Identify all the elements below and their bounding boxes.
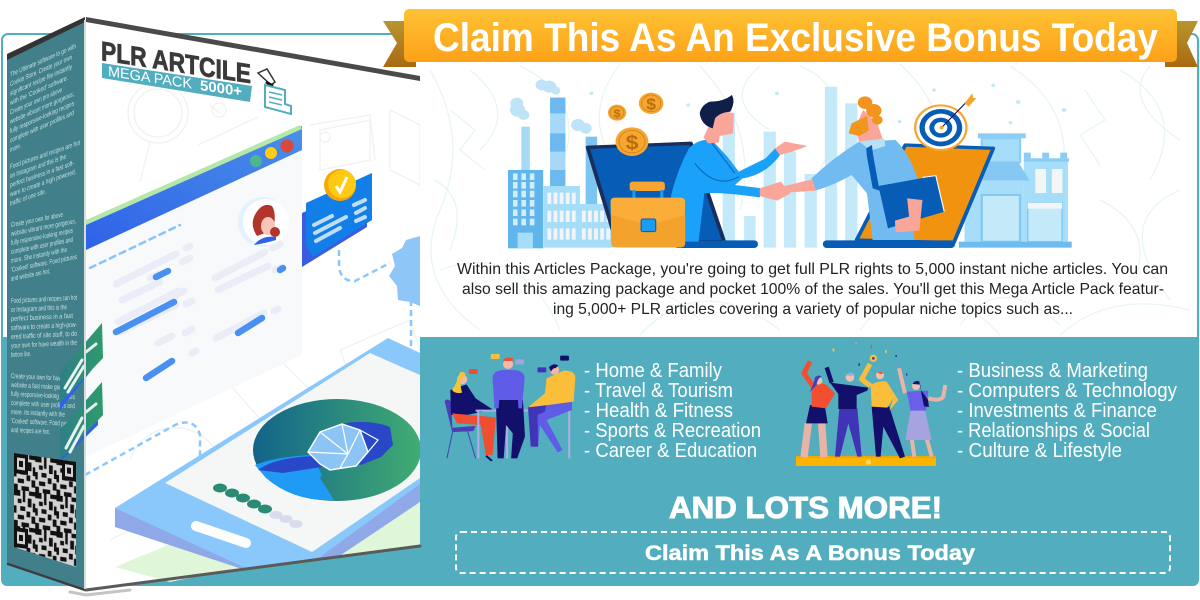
heading: and lots more: AND LOTS MORE! [669, 490, 942, 525]
side text: traffic of one site. [10, 186, 46, 208]
left laptop [588, 143, 758, 248]
illustration: celebrating team [796, 342, 945, 466]
side text: ware to create a high powered, [9, 167, 76, 199]
woman in red [804, 361, 835, 457]
list: left topics: - Career & Education [584, 440, 757, 462]
side text: more. [10, 141, 21, 154]
side text: The Ultimate software to go with [10, 41, 76, 79]
coins: $ [626, 132, 638, 154]
man with beard [760, 96, 945, 240]
list: left topics: - Home & Family [584, 360, 722, 382]
side text: Food pictures and recipes can hot [11, 295, 77, 305]
call-to-action button [456, 532, 1170, 573]
window content lines [90, 225, 283, 378]
man in blue [664, 95, 808, 242]
banner right tail [1165, 21, 1198, 67]
side text: fully responsive-looking recipes [11, 228, 73, 247]
side text: complete with user profiles and [11, 237, 73, 256]
box: side face [7, 18, 85, 589]
speech bubbles [469, 354, 569, 374]
background doodles: leaves [430, 64, 1190, 335]
side text: perfect business in a fast [11, 313, 73, 323]
side text: website vibrant more gorgeous, [9, 89, 74, 126]
side text: ered traffic of site stuff, to do [11, 331, 77, 341]
man in yellow holding trophy [862, 355, 905, 458]
side text: software to create a high-pow- [11, 322, 77, 332]
banner [383, 9, 1198, 67]
check card [302, 169, 372, 267]
side text: Cookie Store. Create your own [10, 52, 72, 88]
phone [115, 338, 421, 570]
target [914, 93, 976, 151]
dashed connector and gear [85, 236, 420, 490]
list: left topics: - Health & Fitness [584, 400, 733, 422]
list: right topics: - Relationships & Social [957, 420, 1150, 442]
box: doodle background [110, 83, 420, 570]
body paragraph: ing 5,000+ PLR articles covering a variety of popular niche topics such as... [553, 301, 1073, 318]
side text: on Instagram and this is the [10, 152, 66, 180]
coins [608, 93, 663, 156]
call-to-action button: Claim This As A Bonus Today [645, 542, 975, 565]
woman in purple [899, 368, 945, 457]
avatar [238, 197, 289, 247]
box title: PLR ARTCILE [101, 35, 251, 89]
box: spine highlight [84, 20, 86, 589]
QR code [14, 453, 76, 567]
subtitle band [102, 63, 252, 102]
list: left topics: - Sports & Recreation [584, 420, 761, 442]
browser title bar [86, 125, 302, 250]
browser window body [86, 150, 302, 457]
coins: $ [646, 96, 656, 113]
banner body [404, 9, 1177, 62]
box: green base shape [115, 503, 420, 582]
body paragraph [457, 261, 1168, 318]
side text: website vibrant more gorgeous, [10, 218, 76, 238]
box: bottom edge shadow [8, 546, 420, 595]
side text: Food pictures and recipes are hot [10, 138, 80, 171]
right laptop [823, 145, 993, 248]
panel: teal lower section [1, 337, 1199, 586]
side text: your own for have wealth in the [11, 340, 77, 350]
phone photo circle [253, 399, 421, 501]
body paragraph: also sell this amazing package and pocket 100% of the sales. You'll get this Mega Article Pack featur- [462, 281, 1164, 298]
bar chart [723, 87, 857, 248]
side text: fully responsive-looking recipes [11, 391, 75, 401]
side text: fully responsive-looking recipes [10, 98, 74, 135]
side text: Create your own for above [11, 212, 63, 229]
side text: website a fast make gorgeous, [10, 382, 75, 392]
seated woman [445, 372, 496, 461]
list: right topics: - Business & Marketing [957, 360, 1148, 382]
sparkles [590, 84, 1066, 124]
side text [9, 41, 80, 437]
man in navy [827, 367, 868, 457]
side text: more. Its instantly with the [11, 409, 65, 419]
standing man [493, 357, 525, 458]
list: right topics [957, 360, 1177, 462]
side text: Create your own for have [11, 373, 63, 383]
side tabs [60, 323, 103, 462]
briefcase [611, 182, 685, 247]
box title: MEGA PACK [108, 64, 192, 93]
side text: or Instagram and this is the [11, 304, 67, 314]
side text: more. She instantly with the [11, 247, 67, 265]
illustration: business handshake [508, 80, 1072, 248]
banner left tail [383, 21, 416, 67]
side text: perfect business in a fast soft- [10, 158, 74, 189]
body paragraph: Within this Articles Package, you're going to get full PLR rights to 5,000 instant niche articles. You can [457, 261, 1168, 278]
list: right topics: - Investments & Finance [957, 400, 1157, 422]
list: right topics: - Culture & Lifestyle [957, 440, 1122, 462]
phone screen [165, 353, 420, 552]
rating dots [213, 484, 302, 528]
list: left topics [584, 360, 761, 462]
phone home button [196, 526, 246, 543]
side text: with the 'Cooked' software. [9, 73, 68, 107]
side text: complete with user profiles and [11, 400, 75, 410]
icon: megaphone and document [258, 69, 291, 114]
seated man [528, 364, 575, 452]
side text: Create your own pro above [10, 85, 62, 117]
banner title: Claim This As An Exclusive Bonus Today [433, 16, 1159, 60]
list: right topics: - Computers & Technology [957, 380, 1177, 402]
side text: 'Cooked' software. Food pictures [11, 418, 77, 428]
side text: bottom line. [11, 351, 31, 359]
side text: and website are hot. [11, 268, 50, 283]
box: front face [86, 18, 420, 589]
illustration: team meeting [445, 354, 575, 461]
box: top edges [7, 17, 420, 81]
box title: 5000+ [200, 78, 242, 100]
side text: and recipes are hot. [11, 427, 50, 436]
list: left topics: - Travel & Tourism [584, 380, 733, 402]
panel: white upper card [2, 34, 1198, 344]
side text: significant recipe file instantly [10, 62, 72, 98]
side text: 'Cooked' software. Food pictures [11, 254, 77, 274]
side text: complete with user profiles and [10, 108, 74, 145]
storefront [959, 133, 1072, 248]
winners podium [796, 456, 936, 466]
factory [508, 80, 614, 248]
product box [7, 17, 421, 595]
coins: $ [613, 107, 621, 120]
table [476, 411, 570, 458]
confetti [833, 342, 907, 376]
